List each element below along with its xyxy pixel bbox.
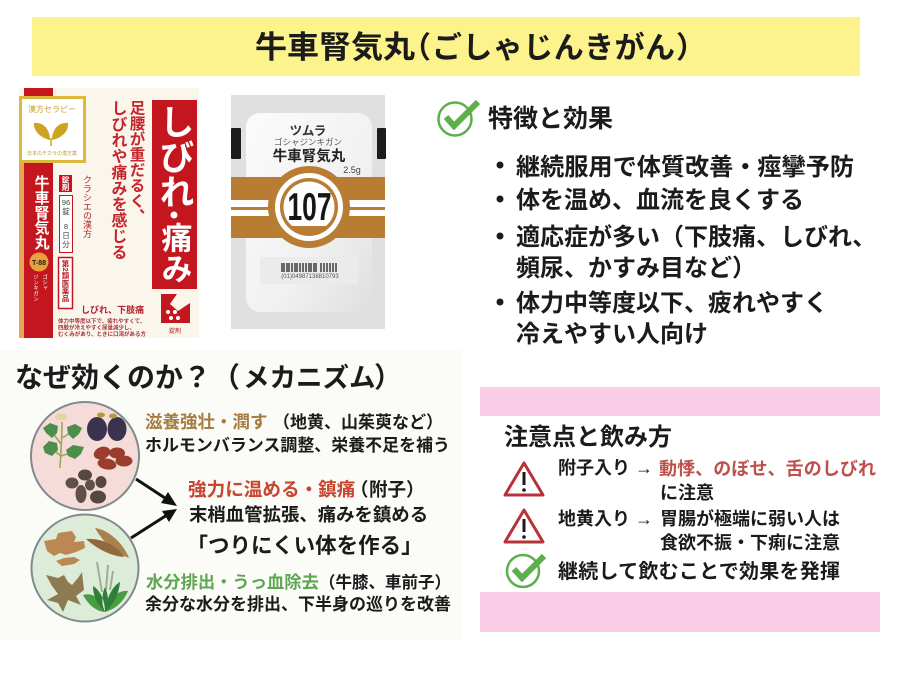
heading: 特徴と効果 (488, 105, 613, 133)
brown band with number 107 (231, 166, 385, 248)
caution: aconite: 動悸、のぼせ、舌のしびれ (659, 459, 876, 479)
text: nourishing: 滋養強壮・潤す (145, 412, 268, 432)
title banner: 牛車腎気丸 (255, 30, 415, 65)
bullet list (496, 154, 876, 348)
arrow: lower circle to centre (131, 509, 177, 538)
heading: メカニズム (243, 363, 376, 393)
bullet list: 適応症が多い（下肢痛、しびれ、 (516, 223, 876, 251)
red tagline vertical (108, 100, 145, 260)
heading: 注意点と飲み方 (504, 424, 672, 451)
tablet count boxes (58, 175, 72, 308)
caution: rehmannia: 地黄入り → (558, 508, 653, 529)
indication text: 体力中等度以下で、疲れやすくて、 (58, 317, 145, 325)
title banner: ） (676, 32, 706, 65)
big red symptom panel: しびれ (154, 104, 194, 209)
caution: aconite (558, 458, 876, 503)
text: water drainage (145, 572, 451, 614)
Kracie label: クラシエの漢方 (82, 175, 92, 239)
text: warming and pain relief (186, 479, 428, 558)
bullet list: 継続服用で体質改善・痙攣予防 (516, 154, 854, 181)
title banner: （ (401, 32, 431, 65)
title banner (32, 17, 860, 76)
package: Kracie red and cream box (19, 88, 199, 338)
pink band top (480, 387, 880, 416)
icon: green check (507, 555, 544, 587)
T-88 badge: T-88 (32, 260, 46, 267)
barcode: (01)04987138810793 (281, 274, 339, 280)
text: nourishing: （地黄、山茱萸など） (273, 413, 443, 432)
panel: mechanism (0, 350, 461, 640)
indication text: むくみがあり、ときに口渇がある方 (58, 330, 147, 338)
package: Tsumura 107 sachet: ツムラ (290, 124, 326, 138)
icon: warning triangle 2 (505, 510, 543, 542)
indication text: 四肢が冷えやすく尿量減少し、 (58, 324, 135, 332)
text: warming and pain relief: 「つりにくい体を作る」 (186, 534, 423, 558)
big red symptom panel (152, 100, 197, 289)
package: Tsumura 107 sachet: 牛車腎気丸 (273, 147, 346, 165)
tablet count boxes: 錠剤 (61, 175, 70, 192)
small katakana vertical (32, 273, 48, 302)
barcode (260, 257, 358, 284)
package: Tsumura 107 sachet (231, 95, 386, 329)
red tagline vertical: しびれや痛みを感じる (108, 100, 128, 260)
title banner: ごしゃじんきがん (432, 31, 675, 65)
pink band bottom (480, 592, 880, 632)
bullet list: 冷えやすい人向け (516, 321, 708, 348)
icon: warning triangle 1 (505, 463, 543, 495)
icon: green check (438, 102, 478, 136)
heading: ） (374, 362, 402, 393)
heading: （ (212, 362, 240, 393)
big red symptom panel: 痛み (156, 222, 192, 284)
brown band with number 107: 107 (288, 186, 332, 229)
caution: rehmannia: 胃腸が極端に弱い人は (660, 508, 840, 529)
package: Tsumura 107 sachet: 2.5g (343, 165, 361, 175)
red tagline vertical: 足腰が重だるく、 (128, 100, 145, 224)
heading: なぜ効くのか？ (15, 362, 211, 393)
caution: aconite: に注意 (660, 483, 714, 503)
brand label with leaf logo: 日本のチカラの漢方薬 (27, 150, 77, 157)
tablet icon (161, 294, 190, 335)
indication text (58, 304, 147, 338)
tablet count boxes: 第2類医薬品 (61, 259, 70, 303)
arrow: upper circle to centre (136, 479, 177, 506)
text: warming and pain relief: ） (406, 479, 425, 500)
caution: rehmannia (558, 508, 840, 553)
text: nourishing (145, 412, 450, 455)
bullet list: 体を温め、血流を良くする (516, 187, 804, 214)
tablet count boxes: 96 (62, 198, 70, 207)
tablet count boxes: 分 (62, 240, 70, 249)
bullet list: 体力中等度以下、疲れやすく (516, 290, 828, 317)
brand label with leaf logo: 漢方セラピー (28, 104, 76, 114)
text: nourishing: ホルモンバランス調整、栄養不足を補う (145, 435, 450, 455)
bullet list: 頻尿、かすみ目など） (516, 255, 756, 282)
T-88 badge (30, 252, 48, 272)
tablet icon: 錠剤 (169, 327, 181, 335)
herb circle: water-draining herbs (32, 514, 138, 622)
continuation note: 継続して飲むことで効果を発揮 (558, 560, 840, 583)
text: warming and pain relief: 強力に温める・鎮痛 (188, 479, 355, 500)
panel: features and effects (438, 102, 876, 348)
text: water drainage: 余分な水分を排出、下半身の巡りを改善 (145, 594, 451, 614)
small katakana vertical: ゴシャ (41, 273, 48, 290)
small katakana vertical: ジンキガン (32, 274, 39, 302)
herb circle: nourishing herbs (31, 402, 139, 510)
caution: aconite: 附子入り → (558, 458, 653, 478)
package: Tsumura 107 sachet: ゴシャジンキガン (274, 137, 342, 147)
panel: cautions and how to take (480, 387, 880, 632)
tablet count boxes: 錠 (62, 207, 70, 216)
product name vertical: 牛車腎気丸 (32, 175, 50, 251)
indication text: しびれ、下肢痛 (81, 304, 144, 315)
tablet count boxes: 8 (64, 222, 68, 231)
brand label with leaf logo (20, 98, 84, 162)
text: water drainage: （牛膝、車前子） (319, 573, 451, 592)
caution: rehmannia: 食欲不振・下痢に注意 (660, 533, 840, 553)
text: warming and pain relief: 末梢血管拡張、痛みを鎮める (189, 504, 428, 525)
tablet count boxes: 日 (62, 231, 70, 240)
text: water drainage: 水分排出・うっ血除去 (146, 572, 319, 592)
text: warming and pain relief: 附子 (369, 479, 406, 500)
text: warming and pain relief: （ (350, 479, 369, 500)
